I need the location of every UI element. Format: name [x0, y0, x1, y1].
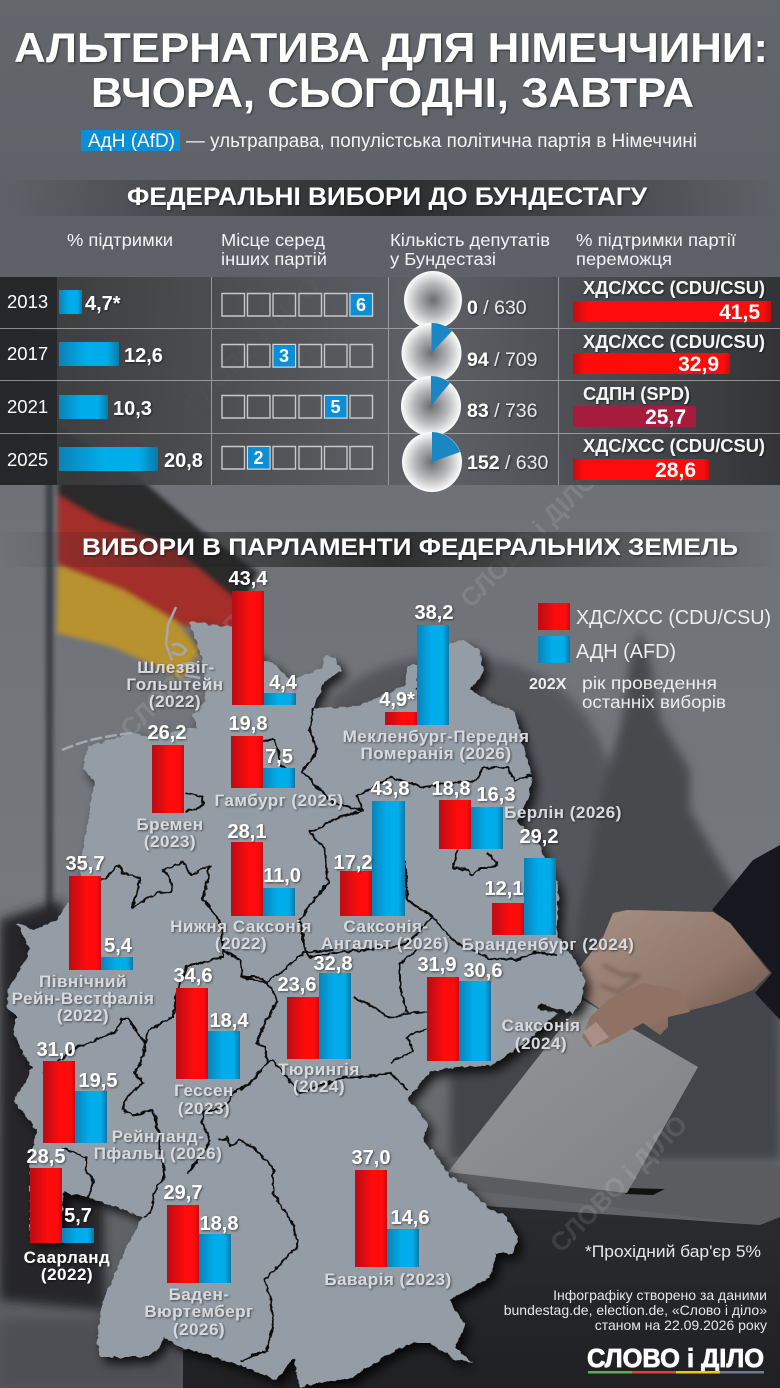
footnote: *Прохідний бар'єр 5% [585, 1242, 761, 1261]
title: АЛЬТЕРНАТИВА ДЛЯ НІМЕЧЧИНИ: [14, 24, 768, 71]
islands [62, 607, 200, 750]
support bars: 10,3 [113, 398, 152, 420]
hand [580, 845, 780, 1035]
chart: Thuringia: 32,8 [314, 953, 352, 975]
subtitle: — ультраправа, популістська політична партія в Німеччині [186, 131, 697, 152]
chart: Rhineland-Palatinate: Рейнланд- [112, 1127, 204, 1146]
chart: Saxony-Anhalt: Саксонія- [343, 917, 429, 936]
deputy pies [401, 271, 548, 492]
years: 2021 [7, 396, 48, 417]
chart: Rhineland-Palatinate: 31,0 [37, 1039, 75, 1061]
deputy pies: 0 / 630 [467, 297, 527, 319]
chart: Hamburg: Гамбург (2025) [214, 791, 344, 810]
chart: Lower Saxony: (2022) [215, 934, 267, 953]
ballot [448, 1000, 698, 1193]
deputy pies: 83 / 736 [467, 400, 538, 422]
winner bars: 28,6 [655, 459, 696, 482]
chart: Baden-Wurttemberg: 18,8 [200, 1213, 238, 1235]
winner bars: ХДС/ХСС (CDU/CSU) [583, 332, 765, 352]
watermark: СЛОВО і ДІЛО [454, 464, 603, 613]
support bars: 20,8 [164, 450, 203, 472]
chart: Hesse: 18,4 [210, 1010, 249, 1032]
chart: Saxony-Anhalt [321, 778, 449, 953]
chart: Schleswig-Holstein: 43,4 [229, 568, 268, 590]
deputy pies: 94 / 709 [467, 349, 538, 371]
chart: North Rhine-Westphalia: 5,4 [104, 935, 133, 957]
map of Germany [7, 607, 585, 1387]
legend [529, 603, 771, 712]
logo: СЛОВО і ДІЛО [587, 1343, 764, 1373]
chart: Lower Saxony: 11,0 [263, 865, 301, 887]
chart: Saxony [418, 954, 580, 1061]
years: 2025 [7, 449, 48, 470]
source note: Інфографіку створено за даними [553, 1287, 767, 1303]
years [7, 291, 48, 470]
chart: Mecklenburg-Vorpommern: 38,2 [415, 602, 453, 624]
chart: Bavaria: Баварія (2023) [324, 1270, 452, 1289]
column headers: % підтримки [67, 230, 173, 250]
chart: Saarland: 5,7 [64, 1205, 92, 1227]
legend: останніх виборів [582, 692, 726, 712]
chart: Lower Saxony: Нижня Саксонія [170, 917, 312, 936]
chart: Hamburg: 19,8 [229, 713, 267, 735]
watermark: СЛОВО і ДІЛО [114, 594, 263, 743]
title [14, 24, 768, 116]
chart: Saxony: (2024) [515, 1034, 567, 1053]
chart: Saarland: (2022) [41, 1265, 93, 1284]
years: 2017 [7, 343, 48, 364]
chart: North Rhine-Westphalia: (2022) [57, 1006, 109, 1025]
winner bars: ХДС/ХСС (CDU/CSU) [583, 278, 765, 298]
chart: Bavaria [324, 1147, 452, 1289]
place squares: 6 [356, 295, 366, 315]
support bars [59, 290, 203, 472]
chart: Thuringia [278, 953, 360, 1096]
winner bars: ХДС/ХСС (CDU/CSU) [583, 436, 765, 456]
chart: Saxony: 30,6 [464, 960, 502, 982]
chart: Baden-Wurttemberg: 29,7 [164, 1182, 202, 1204]
ballot box [183, 1157, 780, 1388]
chart: Baden-Wurttemberg: (2026) [173, 1320, 225, 1339]
column headers: інших партій [221, 249, 327, 269]
chart: Rhineland-Palatinate: Пфальц (2026) [94, 1144, 222, 1163]
thumb [582, 965, 690, 1047]
flag and pole [46, 415, 258, 925]
title: ВЧОРА, СЬОГОДНІ, ЗАВТРА [91, 69, 694, 116]
column headers: у Бундестазі [390, 249, 496, 269]
column headers: % підтримки партії [576, 230, 736, 250]
chart: Hesse: (2023) [178, 1099, 230, 1118]
chart: Brandenburg [462, 826, 634, 954]
winner bars: СДПН (SPD) [583, 384, 690, 404]
chart: Rhineland-Palatinate: 19,5 [79, 1070, 117, 1092]
heading: federal elections: ФЕДЕРАЛЬНІ ВИБОРИ ДО БУНДЕСТАГУ [127, 183, 647, 211]
heading: state elections [0, 532, 780, 567]
chart: Rhineland-Palatinate [37, 1039, 222, 1163]
chart: Saarland [24, 1146, 110, 1284]
chart: Mecklenburg-Vorpommern [343, 602, 529, 763]
chart: Brandenburg: 29,2 [520, 826, 558, 848]
deputy pies: 152 / 630 [467, 452, 548, 474]
legend: рік проведення [582, 673, 717, 693]
chart: North Rhine-Westphalia: Рейн-Вестфалія [12, 989, 154, 1008]
winner bars: 25,7 [645, 406, 686, 429]
place squares: 2 [253, 448, 264, 468]
chart: Hamburg [214, 713, 344, 810]
legend: 202X [529, 676, 567, 693]
chart: Bremen: Бремен [136, 815, 204, 834]
source note [504, 1287, 767, 1333]
chart: Thuringia: 23,6 [278, 974, 316, 996]
legend: ХДС/ХСС (CDU/CSU) [576, 607, 771, 629]
chart: Berlin [432, 778, 622, 849]
chart: Brandenburg: Бранденбург (2024) [462, 935, 634, 954]
chart: Baden-Wurttemberg [144, 1182, 254, 1339]
chart: Saxony-Anhalt: 17,2 [334, 852, 372, 874]
chart: Mecklenburg-Vorpommern: Мекленбург-Передня [343, 727, 529, 746]
chart: Saxony: Саксонія [502, 1016, 580, 1035]
chart: North Rhine-Westphalia [12, 853, 154, 1025]
heading: state elections: ВИБОРИ В ПАРЛАМЕНТИ ФЕДЕРАЛЬНИХ ЗЕМЕЛЬ [82, 534, 738, 561]
legend: АДН (AFD) [576, 641, 676, 663]
place squares [222, 294, 372, 469]
support bars: 4,7* [85, 293, 121, 315]
chart: Hesse [174, 965, 249, 1118]
column headers: Місце серед [221, 230, 325, 250]
chart: Mecklenburg-Vorpommern: 4,9* [379, 689, 415, 711]
source note: станом на 22.09.2026 року [595, 1317, 767, 1333]
chart: Bavaria: 14,6 [391, 1207, 429, 1229]
chart: North Rhine-Westphalia: 35,7 [66, 853, 104, 875]
chart: Thuringia: Тюрингія [278, 1060, 360, 1079]
winner bars [573, 278, 771, 482]
chart: Schleswig-Holstein: 4,4 [269, 672, 298, 694]
chart: Berlin: 18,8 [432, 778, 470, 800]
chart: North Rhine-Westphalia: Північний [39, 972, 127, 991]
place squares: 3 [279, 346, 289, 366]
chart: Saarland: 28,5 [27, 1146, 65, 1168]
federal table [0, 271, 780, 492]
chart: Hamburg: 7,5 [265, 746, 293, 768]
place squares: 5 [330, 397, 341, 417]
heading: federal elections [0, 180, 780, 216]
chart: Saxony-Anhalt: 43,8 [371, 778, 409, 800]
subtitle: АдН (AfD) [88, 131, 175, 152]
chart: Schleswig-Holstein: (2022) [149, 692, 201, 711]
state borders [43, 708, 557, 1362]
chart: Saxony: 31,9 [418, 954, 456, 976]
chart: Bremen: (2023) [144, 832, 196, 851]
years: 2013 [7, 291, 48, 312]
chart: Mecklenburg-Vorpommern: Померанія (2026) [360, 744, 512, 763]
source note: bundestag.de, election.de, «Слово і діло» [504, 1302, 767, 1318]
chart: Saxony-Anhalt: Ангальт (2026) [321, 934, 449, 953]
winner bars: 32,9 [678, 353, 719, 376]
chart: Saarland: Саарланд [24, 1248, 110, 1267]
chart: Berlin: Берлін (2026) [504, 803, 622, 822]
chart: Thuringia: (2024) [293, 1077, 345, 1096]
chart: Hesse: Гессен [174, 1081, 234, 1100]
chart: Hesse: 34,6 [174, 965, 212, 987]
watermark: СЛОВО і ДІЛО [177, 271, 326, 420]
column headers: Кількість депутатів [390, 230, 550, 250]
chart: Lower Saxony: 28,1 [228, 821, 266, 843]
chart: Schleswig-Holstein: Шлезвіг- [137, 658, 215, 677]
parliament dome [0, 630, 780, 1388]
chart: Bremen [136, 722, 204, 851]
watermark [114, 271, 693, 1258]
chart: Schleswig-Holstein: Гольштейн [126, 675, 224, 694]
chart: Brandenburg: 12,1 [485, 878, 523, 900]
chart: Baden-Wurttemberg: Вюртемберг [144, 1302, 254, 1321]
chart: Lower Saxony [170, 821, 312, 953]
support bars: 12,6 [124, 345, 163, 367]
winner bars: 41,5 [719, 301, 760, 324]
chart: Berlin: 16,3 [477, 784, 515, 806]
chart: Schleswig-Holstein [126, 568, 298, 711]
chart: Bavaria: 37,0 [352, 1147, 390, 1169]
column headers: переможця [576, 249, 672, 269]
watermark: СЛОВО і ДІЛО [544, 1109, 693, 1258]
chart: Baden-Wurttemberg: Баден- [169, 1285, 229, 1304]
chart: Bremen: 26,2 [148, 722, 186, 744]
column headers [67, 230, 736, 269]
